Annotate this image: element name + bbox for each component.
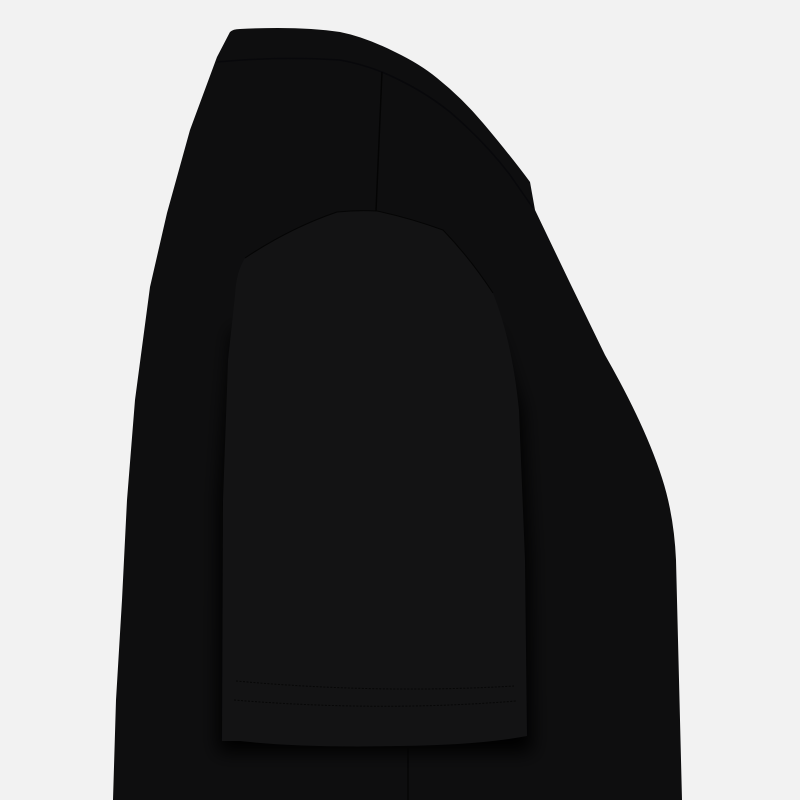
collar rib xyxy=(217,58,533,208)
sleeve upper seam line xyxy=(245,211,493,293)
sleeve xyxy=(222,211,527,746)
shoulder seam xyxy=(376,72,382,211)
soft sleeve shadow xyxy=(218,330,532,752)
shirt body xyxy=(113,28,682,800)
sleeve upper stitching xyxy=(236,681,514,689)
side seam xyxy=(407,742,409,800)
sleeve lower stitching xyxy=(234,700,516,706)
